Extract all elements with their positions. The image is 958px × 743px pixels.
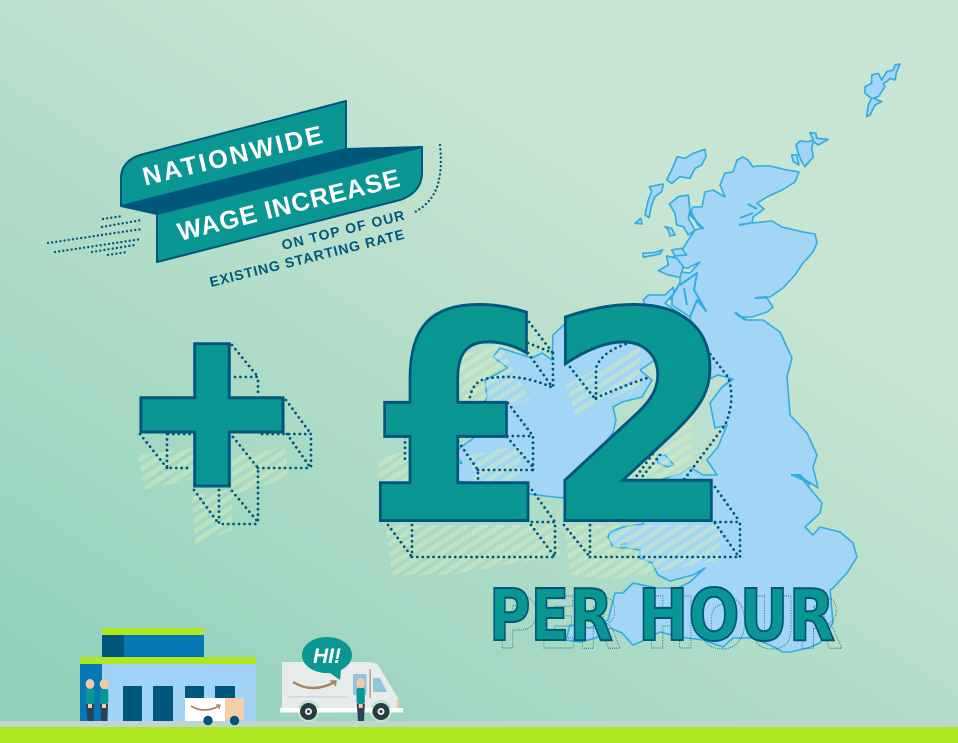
banner top ribbon <box>121 101 346 206</box>
banner: nationwide wage increase <box>121 101 422 290</box>
bubble text: HI! <box>313 645 341 668</box>
per hour text: HOUR <box>638 574 835 657</box>
per hour text <box>489 574 835 657</box>
banner heading: nationwide: NATIONWIDE <box>140 121 325 191</box>
delivery van <box>280 662 403 722</box>
speed dots <box>48 145 441 255</box>
map: Great Britain mainland <box>566 157 857 652</box>
per hour text: PER <box>489 574 613 657</box>
banner caption line one: ON TOP OF OUR <box>280 207 406 253</box>
banner heading: wage increase: WAGE INCREASE <box>175 164 403 247</box>
per hour label <box>489 574 843 665</box>
pound sign: £ <box>364 250 550 589</box>
number two: 2 <box>543 251 735 589</box>
banner lower ribbon <box>157 147 422 262</box>
plus sign: + <box>124 285 300 531</box>
map of the UK <box>445 64 900 652</box>
plus sign: + <box>124 285 300 531</box>
hatched shadows <box>138 345 720 580</box>
big pound two amount <box>364 250 735 589</box>
people at warehouse <box>86 679 108 721</box>
road and grass <box>0 721 958 743</box>
dotted lines: number two <box>564 342 740 557</box>
banner dark fold <box>121 147 422 214</box>
per hour dotted ghost <box>497 582 843 665</box>
map: Scottish islands <box>635 64 900 313</box>
per hour dotted ghost: PER <box>497 582 621 665</box>
banner caption line two: EXISTING STARTING RATE <box>208 226 406 290</box>
per hour dotted ghost: HOUR <box>646 582 843 665</box>
dotted lines: pound sign <box>388 322 555 557</box>
speech bubble: hi <box>302 637 352 680</box>
warehouse building <box>80 628 256 721</box>
map: Anglesey <box>657 455 674 467</box>
dotted lines: plus <box>140 345 311 524</box>
map: Ireland <box>445 315 655 498</box>
map: lochs and firths <box>620 204 810 545</box>
van driver <box>356 678 365 721</box>
dotted 3D extrusion lines <box>140 322 740 557</box>
delivery cart with smile <box>185 698 244 725</box>
